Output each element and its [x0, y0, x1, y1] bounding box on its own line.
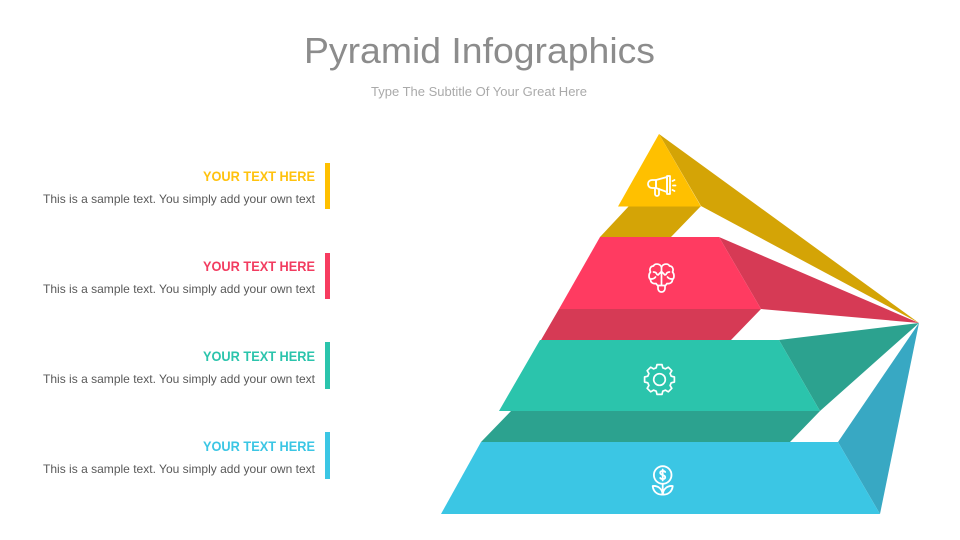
text block 4: blue: This is a sample text. You simply add your own text	[43, 462, 316, 476]
text block 2: red: YOUR TEXT HERE	[203, 258, 315, 274]
text block 2: red	[43, 253, 330, 299]
tier 1: yellow	[600, 134, 919, 323]
subtitle: Type The Subtitle Of Your Great Here	[371, 84, 587, 99]
icon: gear	[645, 365, 674, 394]
icon: megaphone	[648, 176, 676, 196]
title: Pyramid Infographics	[304, 30, 655, 71]
pyramid chart	[441, 134, 919, 514]
text block 3: teal	[43, 342, 330, 389]
text block 4: blue: YOUR TEXT HERE	[203, 438, 315, 454]
tier 3: teal	[481, 323, 919, 442]
text block 3: teal: YOUR TEXT HERE	[203, 348, 315, 364]
text block 3: teal: This is a sample text. You simply add your own text	[43, 372, 316, 386]
text block 1: yellow: This is a sample text. You simply add your own text	[43, 192, 316, 206]
text block 4: blue	[43, 432, 330, 479]
text block 1: yellow: YOUR TEXT HERE	[203, 168, 315, 184]
tier 2: red	[541, 237, 919, 340]
text block 2: red: This is a sample text. You simply add your own text	[43, 282, 316, 296]
icon: money plant	[653, 466, 673, 495]
text block 1: yellow	[43, 163, 330, 209]
tier 4: blue	[441, 323, 919, 514]
icon: brain	[649, 264, 674, 292]
